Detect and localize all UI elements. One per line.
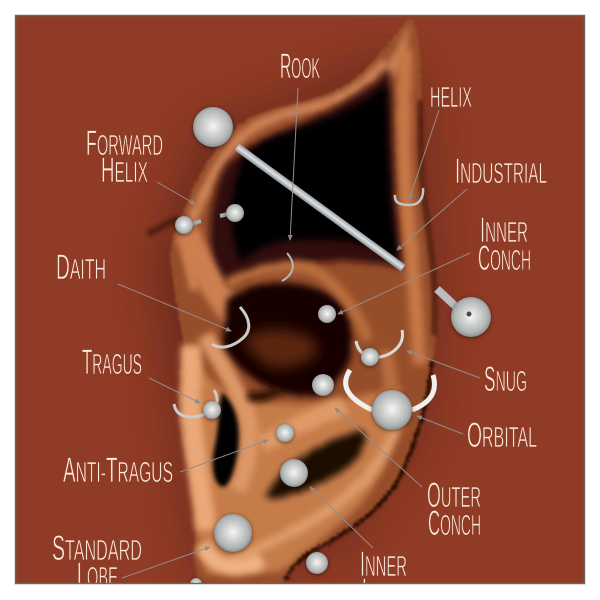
lower ear light mass: [184, 350, 400, 574]
daith crus band: [187, 232, 240, 322]
ear canal: [213, 392, 239, 487]
leader: helix: [409, 110, 439, 200]
label: Rook: ROOK: [280, 47, 320, 86]
right edge shadow: [420, 100, 435, 335]
label: Helix: HELIX: [430, 82, 472, 114]
piercing: snug: [356, 330, 403, 366]
piercing: orbital: [346, 370, 434, 430]
label: Inner Conch: [478, 211, 531, 278]
piercing: industrial barbell: [193, 107, 491, 337]
piercing: rook: [282, 253, 293, 281]
label: Standard Lobe: LOBE: [77, 556, 118, 595]
label: Inner Conch: CONCH: [478, 239, 531, 278]
barbell shaft: [237, 147, 403, 268]
crus lower band: [205, 335, 250, 490]
left flap shadow streak: [148, 218, 178, 234]
illustration: ear: [148, 18, 436, 584]
antitragus ridge: [262, 405, 345, 445]
ear tip highlight: [378, 26, 412, 80]
leader: inner conch: [338, 253, 470, 314]
concha bowl dark: [222, 283, 352, 396]
piercing: inner lobe upper: [280, 459, 308, 487]
label: Inner Conch: INNER: [480, 211, 528, 250]
right helix rim highlight: [404, 50, 420, 365]
leader: outer conch: [335, 408, 422, 487]
barbell balls: [193, 107, 233, 147]
label: Forward Helix: [86, 124, 163, 190]
lobe highlight: [202, 545, 262, 567]
label: Tragus: TRAGUS: [82, 343, 142, 382]
canal left shadow: [248, 388, 280, 397]
label: Snug: SNUG: [484, 360, 527, 399]
leader: tragus: [149, 378, 200, 403]
conch right band: [385, 350, 391, 395]
label: Daith: DAITH: [56, 248, 106, 287]
piercing: daith ring: [212, 307, 249, 347]
piercing: standard lobe: [214, 514, 252, 552]
scapha black: [232, 84, 398, 262]
ear shadow: [150, 50, 440, 584]
label: Forward Helix: FORWARD: [86, 124, 163, 163]
label: Inner Lobe: INNER: [360, 545, 407, 584]
label: Forward Helix: HELIX: [101, 151, 148, 190]
leader: snug: [407, 351, 480, 378]
leader: inner lobe: [310, 487, 373, 548]
piercing: lobe back stud small: [190, 578, 202, 590]
label: Standard Lobe: [52, 529, 142, 595]
leader: industrial: [397, 189, 467, 250]
leader: daith: [118, 284, 231, 331]
lower rim highlight: [232, 400, 405, 560]
leader: forward helix: [157, 182, 195, 204]
piercing: anti-tragus: [276, 424, 294, 442]
piercing: helix ring: [395, 188, 423, 205]
piercing: outer conch stud: [312, 374, 334, 396]
leader: rook: [290, 88, 298, 240]
label: Outer Conch: OUTER: [427, 476, 481, 515]
label: Orbital: ORBITAL: [467, 416, 537, 455]
label: Anti-Tragus: ANTI-TRAGUS: [63, 451, 173, 490]
ear base: [170, 18, 436, 584]
piercing: inner conch stud: [318, 305, 336, 323]
label: Outer Conch: CONCH: [428, 504, 481, 543]
leader lines: [118, 88, 480, 578]
label: Standard Lobe: STANDARD: [52, 529, 142, 568]
tragus light band: [191, 345, 206, 530]
concha floor: [240, 329, 318, 368]
leader: anti-tragus: [180, 440, 268, 472]
antihelix band: [226, 266, 368, 340]
label: Inner Lobe: [360, 545, 407, 600]
piercing: lobe back stud: [306, 552, 328, 574]
lobe fold shadow: [266, 430, 365, 498]
leader: orbital: [417, 416, 463, 434]
hollow brown edge: [210, 68, 402, 296]
leader: standard lobe: [122, 547, 210, 578]
outer edge shadow: [285, 360, 432, 580]
helix rim highlight: [188, 62, 385, 290]
label: Outer Conch: [427, 476, 481, 543]
piercing: tragus: [174, 390, 221, 419]
piercing: forward helix: [175, 204, 244, 234]
